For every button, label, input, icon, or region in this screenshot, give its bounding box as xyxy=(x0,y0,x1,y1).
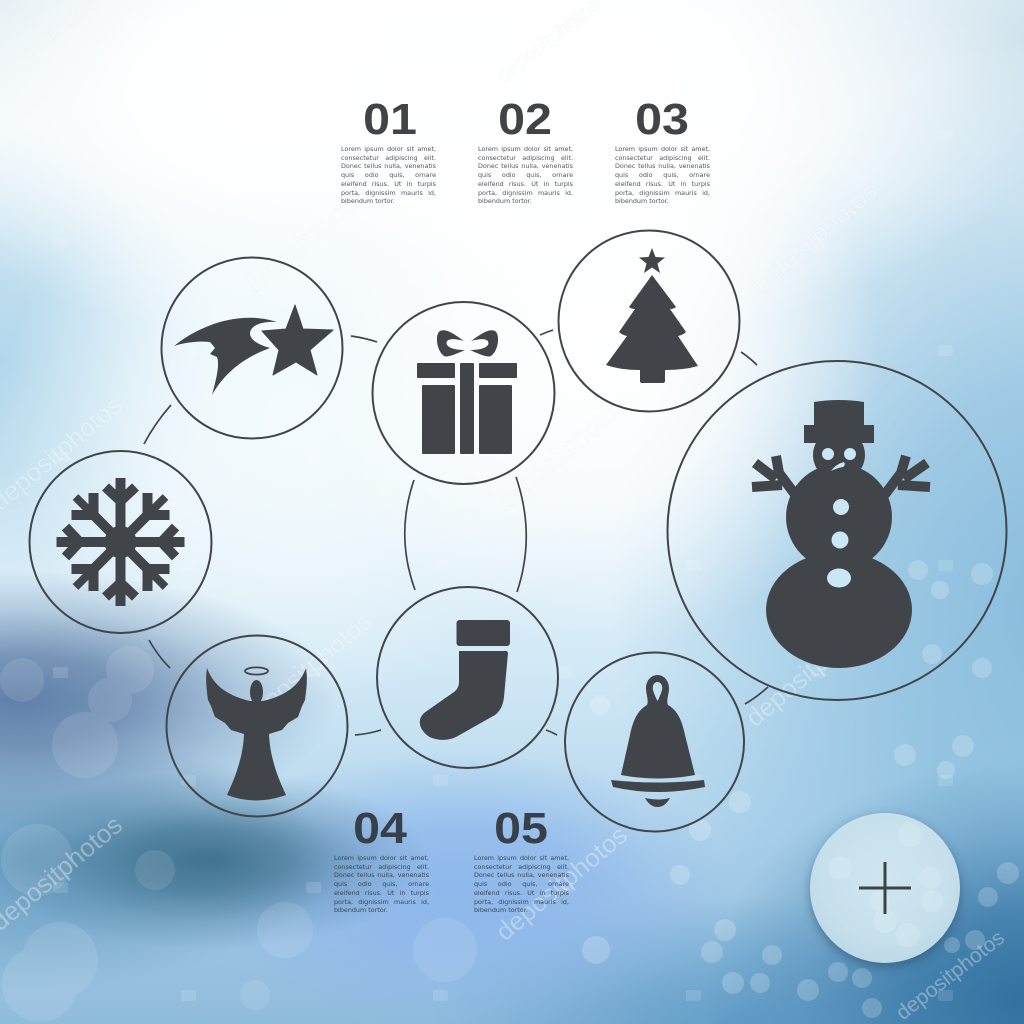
text block: 04 xyxy=(334,854,429,914)
text block: 01: porta, dignissim mauris id, xyxy=(341,189,436,197)
icon: snowman xyxy=(752,400,930,668)
text block: 01: quis odio quis, ornare xyxy=(341,171,436,179)
text block: 02 xyxy=(478,145,573,205)
text block: 01: Donec tellus nulla, venenatis xyxy=(341,162,436,170)
text block: 02: Lorem ipsum dolor sit amet, xyxy=(478,145,573,153)
text block: 04: quis odio quis, ornare xyxy=(334,880,429,888)
heading: 04: 04 xyxy=(353,804,407,853)
text block: 03: porta, dignissim mauris id, xyxy=(615,189,710,197)
icon: gift box xyxy=(417,330,517,454)
watermark: depositphotos xyxy=(490,820,633,947)
circle: gift xyxy=(372,302,554,484)
text block: 03: bibendum tortor. xyxy=(615,197,669,205)
heading: 03: 03 xyxy=(635,95,689,144)
watermark: depositphotos xyxy=(235,176,378,303)
text block: 03: Lorem ipsum dolor sit amet, xyxy=(615,145,710,153)
text block: 04: eleifend risus. Ut in turpis xyxy=(334,889,429,897)
circle: angel xyxy=(166,636,348,816)
icon: christmas tree xyxy=(606,248,698,383)
text block: 05: bibendum tortor. xyxy=(474,906,528,914)
watermark: depositphotos xyxy=(892,926,1009,1024)
text block: 01: bibendum tortor. xyxy=(341,197,395,205)
circle: snowman xyxy=(668,361,1006,700)
heading: 05: 05 xyxy=(494,804,548,853)
text block: 02: quis odio quis, ornare xyxy=(478,171,573,179)
text block: 02: Donec tellus nulla, venenatis xyxy=(478,162,573,170)
text block: 05: porta, dignissim mauris id, xyxy=(474,898,569,906)
icon: stocking xyxy=(420,620,510,740)
text block: 02: porta, dignissim mauris id, xyxy=(478,189,573,197)
text block: 03: quis odio quis, ornare xyxy=(615,171,710,179)
text block: 01: consectetur adipiscing elit. xyxy=(341,154,436,162)
icon: angel xyxy=(206,667,307,800)
text block: 03: consectetur adipiscing elit. xyxy=(615,154,710,162)
circle: christmas tree xyxy=(558,230,740,412)
text block: 05: Donec tellus nulla, venenatis xyxy=(474,871,569,879)
watermark: depositphotos xyxy=(740,606,883,733)
text block: 03 xyxy=(615,145,710,205)
text block: 05 xyxy=(474,854,569,914)
circle: stocking xyxy=(377,587,558,768)
connector lines xyxy=(144,330,768,735)
bokeh lights xyxy=(0,560,1019,1022)
text block: 01: Lorem ipsum dolor sit amet, xyxy=(341,145,436,153)
text block: 04: bibendum tortor. xyxy=(334,906,388,914)
text block: 05: eleifend risus. Ut in turpis xyxy=(474,889,569,897)
heading: 01: 01 xyxy=(363,95,417,144)
circle: bell xyxy=(565,652,744,832)
text block: 04: Donec tellus nulla, venenatis xyxy=(334,871,429,879)
text block: 04: porta, dignissim mauris id, xyxy=(334,898,429,906)
watermark: depositphotos xyxy=(235,606,378,733)
text block: 05: consectetur adipiscing elit. xyxy=(474,863,569,871)
heading: 02: 02 xyxy=(498,95,552,144)
text block: 04: consectetur adipiscing elit. xyxy=(334,863,429,871)
text block: 05: quis odio quis, ornare xyxy=(474,880,569,888)
watermark: depositphotos xyxy=(740,176,883,303)
text block: 05: Lorem ipsum dolor sit amet, xyxy=(474,854,569,862)
text block: 02: consectetur adipiscing elit. xyxy=(478,154,573,162)
circle: shooting star xyxy=(162,258,342,438)
plus button xyxy=(810,813,960,963)
icon: snowflake xyxy=(56,478,184,606)
circle: snowflake xyxy=(30,451,212,633)
icon: shooting star xyxy=(174,305,333,395)
text block: 02: eleifend risus. Ut in turpis xyxy=(478,180,573,188)
text block: 01: eleifend risus. Ut in turpis xyxy=(341,180,436,188)
text block: 03: Donec tellus nulla, venenatis xyxy=(615,162,710,170)
text block: 03: eleifend risus. Ut in turpis xyxy=(615,180,710,188)
watermark: depositphotos xyxy=(490,390,633,517)
text block: 04: Lorem ipsum dolor sit amet, xyxy=(334,854,429,862)
text block: 01 xyxy=(341,145,436,205)
text block: 02: bibendum tortor. xyxy=(478,197,532,205)
icon: bell xyxy=(611,675,705,807)
